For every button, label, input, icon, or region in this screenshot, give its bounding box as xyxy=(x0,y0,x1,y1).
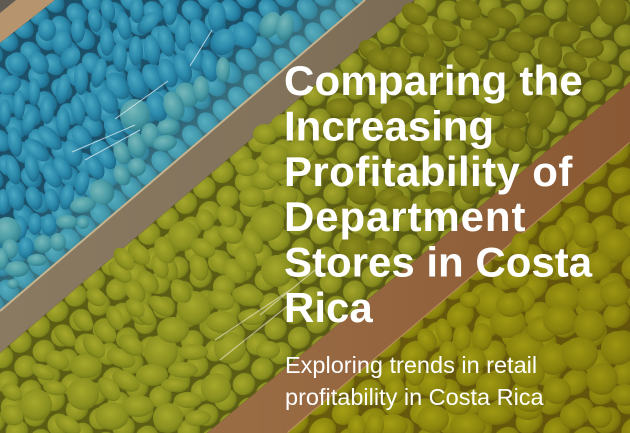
title: Rica xyxy=(284,284,373,331)
blue candy tube xyxy=(0,0,365,311)
title: Department xyxy=(284,193,526,240)
subtitle: Exploring trends in retail xyxy=(285,352,537,378)
title: Comparing the xyxy=(284,57,583,104)
lower tan divider xyxy=(207,82,630,433)
title: Increasing xyxy=(284,102,494,150)
title: Profitability of xyxy=(284,148,573,195)
subtitle xyxy=(285,352,545,410)
title: Stores in Costa xyxy=(284,238,593,286)
yellow-green candy tube xyxy=(288,143,630,433)
subtitle: profitability in Costa Rica xyxy=(285,384,545,410)
title xyxy=(284,57,593,331)
tan corner shelf xyxy=(0,0,55,43)
upper tan divider xyxy=(0,0,415,353)
